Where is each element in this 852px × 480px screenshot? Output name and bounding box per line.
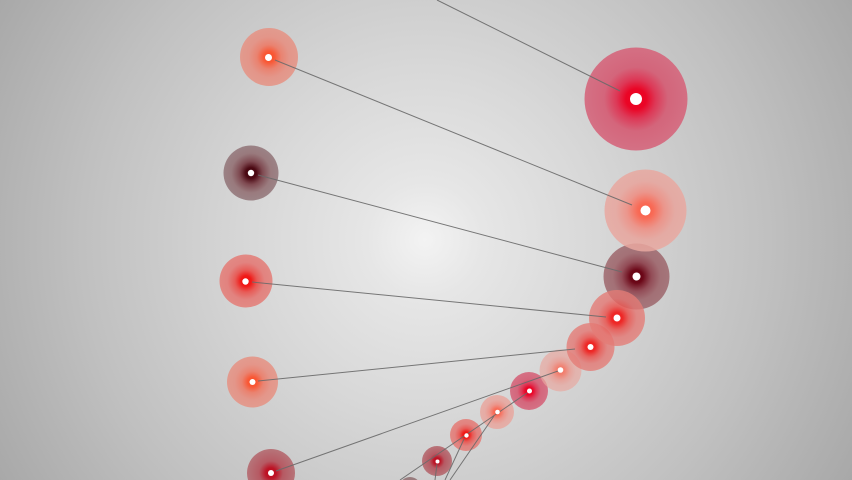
- left strand nodes: [220, 28, 298, 480]
- right strand nodes: [399, 48, 688, 480]
- connecting lines: [252, 0, 632, 480]
- node centres: [242, 54, 651, 476]
